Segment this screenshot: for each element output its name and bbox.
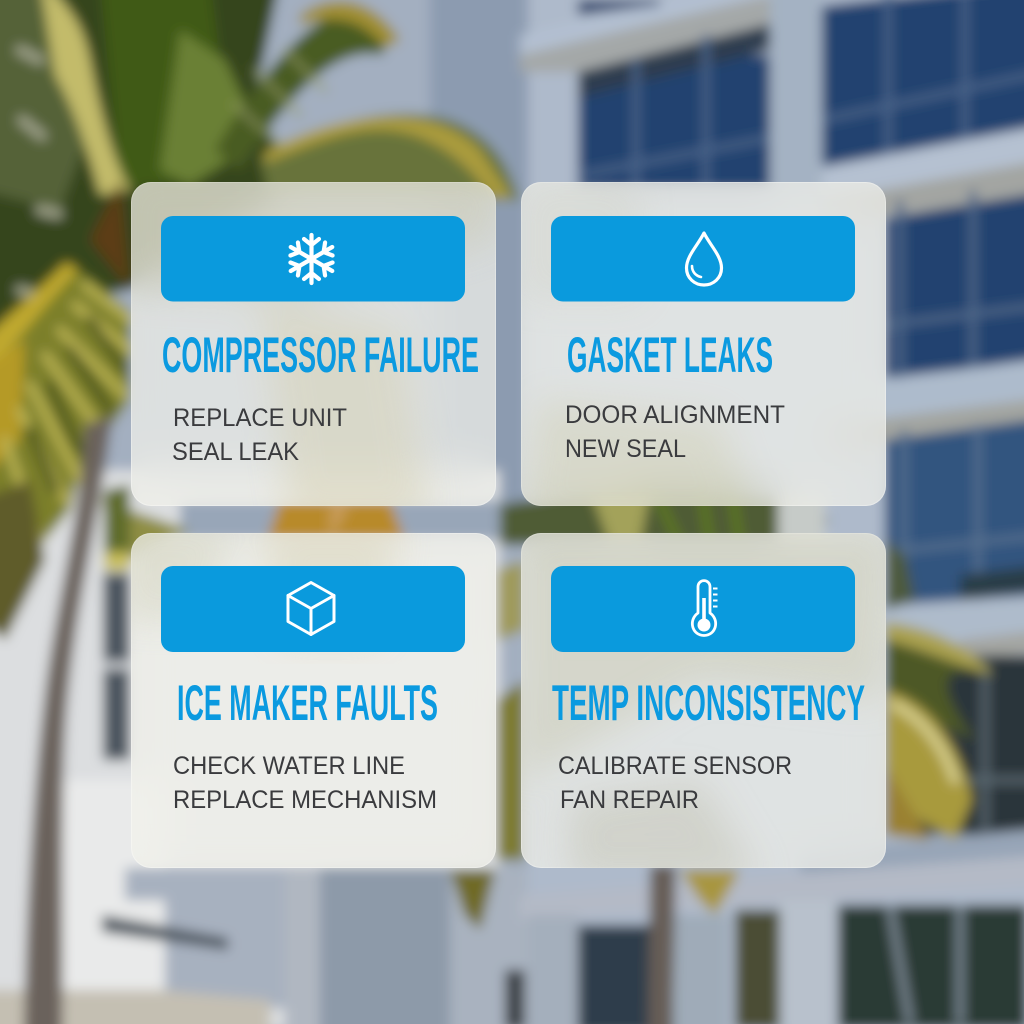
text: fixes for compressor failure	[172, 404, 347, 466]
left frond	[0, 268, 130, 620]
panel: ice maker faults	[131, 533, 496, 868]
text: fixes for temp inconsistency	[558, 752, 792, 814]
icon: cube	[288, 582, 334, 634]
left palm crown	[0, 0, 300, 360]
panel: compressor failure	[131, 182, 496, 506]
text: fixes for ice maker faults	[173, 752, 437, 814]
icon bar: water drop	[551, 216, 855, 302]
panel: gasket leaks	[521, 182, 886, 506]
icon bar: ice cube	[161, 566, 465, 652]
text: fixes for compressor failure: SEAL LEAK	[172, 438, 299, 466]
icon: water drop	[686, 233, 722, 285]
text: fixes for ice maker faults: REPLACE MECHANISM	[173, 786, 437, 814]
centre/right palm	[500, 480, 830, 545]
text: fixes for compressor failure: REPLACE UNIT	[173, 404, 347, 432]
text: fixes for gasket leaks: NEW SEAL	[565, 435, 686, 463]
icon: thermometer	[692, 581, 718, 636]
text: fixes for temp inconsistency: CALIBRATE SENSOR	[558, 752, 792, 780]
panel: temp inconsistency	[521, 533, 886, 868]
trunk	[24, 415, 112, 1024]
icon bar: thermometer	[551, 566, 855, 652]
icon: snowflake	[287, 235, 336, 283]
right building	[528, 0, 1024, 1024]
icon bar: snowflake	[161, 216, 465, 302]
text: fixes for gasket leaks: DOOR ALIGNMENT	[565, 401, 785, 429]
text: fixes for ice maker faults: CHECK WATER LINE	[173, 752, 405, 780]
text: fixes for gasket leaks	[565, 401, 785, 463]
text: fixes for temp inconsistency: FAN REPAIR	[560, 786, 699, 814]
